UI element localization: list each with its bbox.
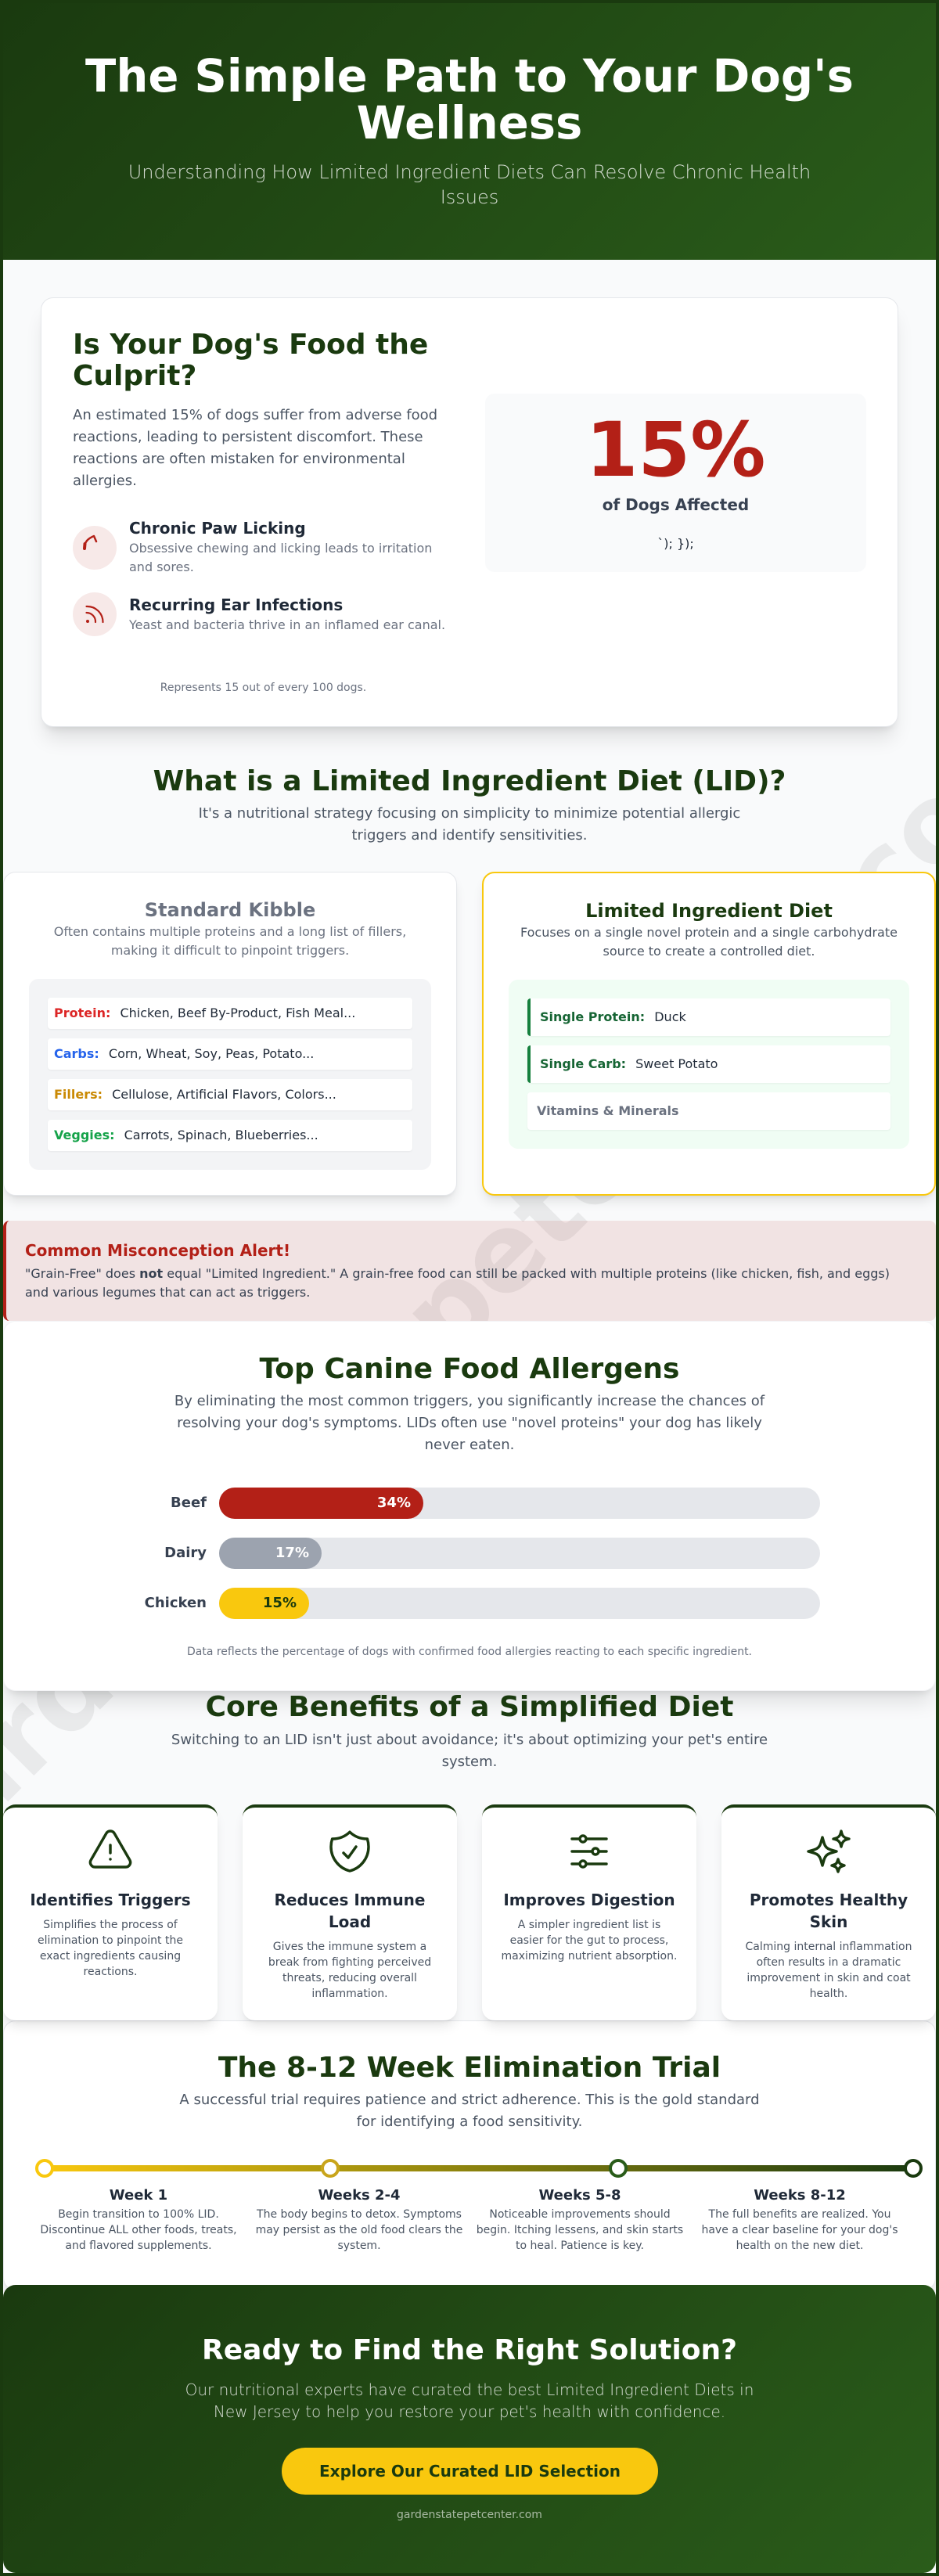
panel: standard kibble [3,872,457,1196]
benefit card: reduces immune load: Gives the immune system a [273,1941,426,1953]
heading: Culprit? [73,360,196,392]
alert text: and various legumes that can act as triggers. [25,1285,310,1300]
benefit card: reduces immune load: inflammation. [311,1988,388,2000]
step: weeks 8-12 [701,2187,898,2252]
kibble ingredient list [29,979,431,1170]
marker: weeks 2-4 [321,2159,340,2178]
chart note: Data reflects the percentage of dogs with confirmed food allergies reacting to each specific ingredient. [187,1646,752,1658]
subtitle: Understanding How Limited Ingredient Diets Can Resolve Chronic Health [128,161,811,183]
step: week 1: Discontinue ALL other foods, treats, [40,2224,237,2236]
big number: 15% [586,406,765,494]
benefit card: promotes healthy skin: often results in a dramatic [757,1956,901,1969]
panel: limited ingredient diet [482,872,936,1196]
CTA button: Explore Our Curated LID Selection [319,2462,621,2481]
text: allergens intro [174,1393,765,1453]
bar: chicken: 15% [263,1595,297,1611]
intro text: allergies. [73,473,137,489]
step: weeks 2-4: The body begins to detox. Symptoms [257,2208,462,2221]
benefit card: promotes healthy skin [721,1804,936,2020]
kibble heading: Standard Kibble [145,899,315,921]
step: weeks 2-4: Weeks 2-4 [318,2187,401,2204]
symptom: chronic paw licking: Chronic Paw Licking [129,519,306,538]
heading [73,329,428,392]
marker: weeks 8-12 [904,2159,923,2178]
ingredient: protein [48,998,412,1029]
benefit card: identifies triggers: exact ingredients causing [40,1950,181,1963]
stat label: of Dogs Affected [603,495,749,514]
LID ingredient list [509,980,909,1149]
step: week 1: Begin transition to 100% LID. [58,2208,219,2221]
panel: top allergens [3,1321,936,1691]
site URL: gardenstatepetcenter.com [397,2509,542,2521]
symptom: chronic paw licking: and sores. [129,559,194,574]
ingredient: fillers [48,1079,412,1110]
bar: beef: Beef [171,1495,207,1511]
text: trial intro: A successful trial requires patience and strict adherence. This is the gold standard [179,2092,760,2108]
benefit card: reduces immune load: Load [329,1912,371,1931]
text: benefits intro: Switching to an LID isn't just about avoidance; it's about optimizing your pet's entire [171,1732,768,1748]
step: weeks 8-12: have a clear baseline for your dog's [701,2224,898,2236]
step: weeks 5-8 [477,2187,683,2252]
benefit card: improves digestion: A simpler ingredient list is [518,1919,660,1931]
intro text [73,407,437,489]
panel: is your dog's food the culprit [41,297,898,727]
bar: dairy: Dairy [164,1545,207,1561]
ingredient: single carb: Single Carb: Sweet Potato [540,1056,718,1071]
icon: ear infection [73,592,117,636]
heading: Is Your Dog's Food the [73,329,428,361]
timeline line [45,2165,913,2171]
benefit card: improves digestion: easier for the gut to process, [510,1934,668,1947]
heading: allergens: Top Canine Food Allergens [260,1353,679,1385]
step: weeks 5-8: to heal. Patience is key. [516,2240,644,2252]
intro text: An estimated 15% of dogs suffer from adverse food [73,407,437,423]
benefit card: improves digestion [482,1804,696,2020]
ingredient: protein: Protein: Chicken, Beef By-Product, Fish Meal... [54,1006,355,1020]
benefit card: reduces immune load: break from fighting perceived [268,1956,431,1969]
kibble description [54,924,406,958]
stat box [485,394,866,572]
text: LID definition: triggers and identify sensitivities. [351,827,588,844]
bar: chicken: Chicken [145,1595,207,1611]
benefit card: identifies triggers: reactions. [84,1966,137,1978]
ingredient: single carb [527,1045,890,1083]
intro text: reactions are often mistaken for environmental [73,451,405,467]
subtitle [128,161,811,208]
panel: call to action [3,2285,936,2573]
bar: chicken [145,1588,820,1619]
title: The Simple Path to Your Dog's [85,50,854,103]
LID description: source to create a controlled diet. [603,944,815,959]
heading: elimination trial: The 8-12 Week Elimination Trial [218,2052,721,2084]
symptom: chronic paw licking [129,519,432,574]
benefit card: promotes healthy skin: Promotes Healthy [750,1891,908,1909]
benefit card: promotes healthy skin: Calming internal inflammation [745,1941,912,1953]
LID description: Focuses on a single novel protein and a single carbohydrate [520,925,898,940]
step: week 1: and flavored supplements. [65,2240,212,2252]
symptom: recurring ear infections: Recurring Ear Infections [129,595,343,614]
icon: sparkles [807,1829,851,1873]
step: weeks 2-4 [256,2187,462,2252]
step: weeks 8-12: health on the new diet. [736,2240,863,2252]
bar chart: allergens [145,1488,820,1619]
text: benefits intro: system. [442,1754,497,1770]
benefit card: identifies triggers: elimination to pinpoint the [38,1934,183,1947]
bar: dairy [164,1538,820,1569]
marker: weeks 5-8 [609,2159,628,2178]
benefit card: identifies triggers: Simplifies the process of [43,1919,178,1931]
chart caption: Represents 15 out of every 100 dogs. [160,682,366,694]
CTA text: New Jersey to help you restore your pet's health with confidence. [214,2402,725,2421]
step: weeks 8-12: Weeks 8-12 [754,2187,846,2204]
benefit card: reduces immune load: threats, reducing overall [282,1972,417,1984]
header banner [3,3,936,260]
benefit card: reduces immune load [243,1804,457,2020]
ingredient: veggies: Veggies: Carrots, Spinach, Blueberries... [54,1128,318,1142]
step: weeks 5-8: Weeks 5-8 [538,2187,621,2204]
marker: week 1 [35,2159,54,2178]
kibble description: Often contains multiple proteins and a long list of fillers, [54,924,406,939]
alert heading: Common Misconception Alert! [25,1241,290,1260]
benefit card: promotes healthy skin: health. [810,1988,847,2000]
text: trial intro: for identifying a food sensitivity. [357,2114,582,2130]
intro text: reactions, leading to persistent discomfort. These [73,429,423,445]
ingredient: carbs [48,1038,412,1070]
text: allergens intro: By eliminating the most common triggers, you significantly increase the chances of [174,1393,765,1409]
LID description [520,925,898,959]
step: weeks 2-4: system. [337,2240,381,2252]
step: week 1 [40,2187,237,2252]
benefit card: identifies triggers [3,1804,218,2020]
step: weeks 5-8: begin. Itching lessens, and skin starts [477,2224,683,2236]
text: allergens intro: resolving your dog's symptoms. LIDs often use "novel proteins" your dog has likely [177,1415,762,1431]
step: weeks 2-4: may persist as the old food clears the [256,2224,462,2236]
title [85,50,854,149]
bar: dairy: 17% [275,1545,309,1561]
alert text [25,1266,890,1300]
ingredient: vitamins [527,1092,890,1130]
text: trial intro [179,2092,760,2130]
icon: shield check [329,1830,370,1873]
benefit card: reduces immune load: Reduces Immune [275,1891,425,1909]
benefit card: improves digestion: maximizing nutrient absorption. [502,1950,677,1963]
ingredient: fillers: Fillers: Cellulose, Artificial Flavors, Colors... [54,1087,336,1102]
bar: beef: 34% [377,1495,411,1511]
callout: misconception alert [3,1221,936,1321]
icon: paw licking [73,526,117,570]
bar: beef [171,1488,820,1519]
ingredient: carbs: Carbs: Corn, Wheat, Soy, Peas, Potato... [54,1046,314,1061]
benefit card: improves digestion: Improves Digestion [503,1891,675,1909]
heading: benefits: Core Benefits of a Simplified Diet [206,1691,733,1723]
step: weeks 5-8: Noticeable improvements should [489,2208,671,2221]
kibble description: making it difficult to pinpoint triggers. [111,943,349,958]
step: weeks 8-12: The full benefits are realized. You [709,2208,890,2221]
ingredient: single protein [527,998,890,1036]
benefit card: promotes healthy skin: improvement in skin and coat [747,1972,911,1984]
symptom: recurring ear infections [129,595,445,632]
step: week 1: Week 1 [110,2187,167,2204]
CTA button [282,2448,658,2495]
subtitle: Issues [441,186,498,208]
symptom: recurring ear infections: Yeast and bacteria thrive in an inflamed ear canal. [129,617,445,632]
LID heading: Limited Ingredient Diet [585,900,833,922]
CTA text: Our nutritional experts have curated the best Limited Ingredient Diets in [185,2380,754,2399]
CTA text [185,2380,754,2421]
icon: warning triangle [89,1829,131,1869]
CTA heading: Ready to Find the Right Solution? [202,2334,737,2366]
stray text: `); }); [657,536,694,551]
icon: sliders [570,1834,608,1869]
timeline [35,2159,923,2178]
ingredient: veggies [48,1120,412,1151]
panel: trial section [3,2020,936,2290]
benefit card: identifies triggers: Identifies Triggers [30,1891,191,1909]
text: benefits intro [171,1732,768,1770]
text: allergens intro: never eaten. [425,1437,514,1453]
ingredient: single protein: Single Protein: Duck [540,1009,686,1024]
text: LID definition [199,805,740,844]
alert text: "Grain-Free" does not equal "Limited Ingredient." A grain-free food can still be packed with multiple proteins (like chicken, fish, and eggs) [25,1266,890,1281]
heading: what is LID: What is a Limited Ingredient Diet (LID)? [153,765,786,797]
ingredient: vitamins: Vitamins & Minerals [537,1103,679,1118]
symptom: chronic paw licking: Obsessive chewing and licking leads to irritation [129,541,432,556]
text: LID definition: It's a nutritional strategy focusing on simplicity to minimize potential allergic [199,805,740,822]
benefit card: promotes healthy skin: Skin [810,1912,847,1931]
title: Wellness [357,97,582,149]
